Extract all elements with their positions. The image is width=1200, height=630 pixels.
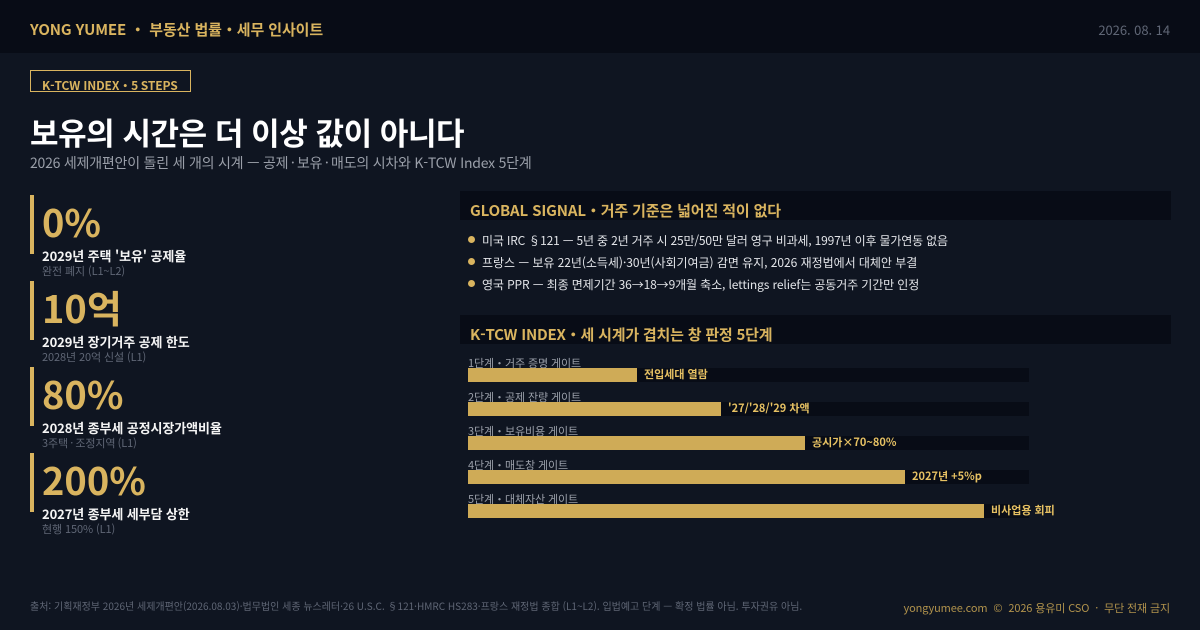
stat: 200%: 200%: [42, 451, 146, 506]
panel: global signal bullets: [468, 232, 948, 293]
step 4: 2027년 +5%p: [912, 468, 982, 484]
heading: global signal: [460, 191, 1171, 220]
header date: 2026. 08. 14: [1098, 20, 1170, 39]
stat: 0%: 2029년 주택 '보유' 공제율: [42, 246, 186, 265]
chart: five-step gate bars: [468, 355, 1055, 518]
stat: 200%: 2027년 종부세 세부담 상한: [42, 504, 190, 523]
heading: k-tcw index: K-TCW INDEX・세 시계가 겹치는 창 판정 5단계: [470, 324, 772, 345]
step 1: [468, 355, 1029, 382]
step 2: 2단계・공제 잔량 게이트: [468, 389, 581, 405]
stat: 80%: 3주택 · 조정지역 (L1): [42, 435, 137, 451]
step 4: 4단계・매도창 게이트: [468, 457, 568, 473]
header brand title: YONG YUMEE ・ 부동산 법률・세무 인사이트: [30, 19, 323, 40]
footer source note: 출처: 기획재정부 2026년 세제개편안(2026.08.03)·법무법인 세종 뉴스레터·26 U.S.C. §121·HMRC HS283·프랑스 재정법 종합 (L1~L2). 입법예고 단계 — 확정 법률 아님. 투자권유 아님.: [30, 598, 802, 613]
header bar: [0, 0, 1200, 53]
bullet: France: 프랑스 — 보유 22년(소득세)·30년(사회기여금) 감면 유지, 2026 재정법에서 대체안 부결: [482, 254, 917, 271]
main title: 보유의 시간은 더 이상 값이 아니다: [30, 109, 464, 154]
bullet: US: 미국 IRC §121 — 5년 중 2년 거주 시 25만/50만 달러 영구 비과세, 1997년 이후 물가연동 없음: [482, 232, 948, 249]
step 2: [468, 389, 1029, 416]
step 5: [468, 491, 1055, 518]
stat: 200%: [30, 451, 190, 537]
step 5: 비사업용 회피: [991, 502, 1055, 518]
step 3: 3단계・보유비용 게이트: [468, 423, 578, 439]
step 5: 5단계・대체자산 게이트: [468, 491, 578, 507]
stat: 10억: 2028년 20억 신설 (L1): [42, 349, 146, 365]
stat: 80%: 2028년 종부세 공정시장가액비율: [42, 418, 222, 437]
stat: 10억: [30, 279, 190, 365]
stat: 10억: 10억: [42, 279, 122, 334]
stat: 80%: [30, 365, 222, 451]
stat: 80%: 80%: [42, 365, 123, 420]
heading: global signal: GLOBAL SIGNAL・거주 기준은 넓어진 적이 없다: [470, 200, 781, 221]
step 3: [468, 423, 1029, 450]
bullet: UK: 영국 PPR — 최종 면제기간 36→18→9개월 축소, lettings relief는 공동거주 기간만 인정: [482, 276, 919, 293]
step 1: 1단계・거주 증명 게이트: [468, 355, 581, 371]
step 2: '27/'28/'29 차액: [728, 400, 810, 416]
tag: index label: [30, 70, 191, 92]
stat: 0%: [30, 193, 186, 279]
stat: 200%: 현행 150% (L1): [42, 521, 115, 537]
heading: k-tcw index: [460, 315, 1171, 344]
subtitle: 2026 세제개편안이 돌린 세 개의 시계 — 공제·보유·매도의 시차와 K-TCW Index 5단계: [30, 153, 532, 173]
panel: key statistics: [30, 193, 222, 537]
stat: 0%: 0%: [42, 193, 101, 248]
stat: 10억: 2029년 장기거주 공제 한도: [42, 332, 190, 351]
step 1: 전입세대 열람: [644, 366, 708, 382]
stat: 0%: 완전 폐지 (L1~L2): [42, 263, 125, 279]
step 4: [468, 457, 1029, 484]
step 3: 공시가×70~80%: [812, 434, 896, 450]
footer copyright: yongyumee.com © 2026 용유미 CSO · 무단 전재 금지: [904, 600, 1170, 616]
